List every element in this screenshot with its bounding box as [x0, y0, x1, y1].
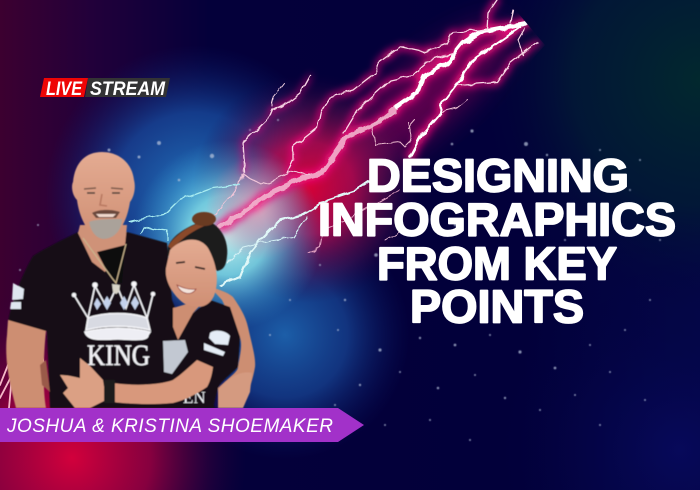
woman: face	[166, 240, 217, 307]
man: hand on woman's back	[218, 372, 252, 408]
QUEEN shirt text fragment: EN	[183, 388, 206, 407]
man: sleeve logo	[10, 283, 24, 309]
name banner	[0, 408, 364, 442]
man: necklace	[83, 238, 126, 283]
badge: red tab	[40, 78, 88, 97]
badge: dark tab	[85, 78, 170, 97]
woman: shirt graphic	[163, 340, 188, 374]
banner: purple arrow	[0, 408, 364, 442]
lightning cores	[130, 0, 537, 285]
man's fingers behind	[40, 360, 50, 392]
man: nose	[100, 194, 107, 206]
man: beard	[89, 219, 122, 239]
woman: shirt	[184, 300, 240, 406]
woman: hair bun	[192, 212, 216, 226]
man: neck	[78, 225, 127, 272]
man: shirt and torso	[7, 232, 215, 408]
star field	[19, 119, 661, 441]
man: eyes and brows	[84, 188, 123, 189]
title: Designing Infographics From Key Points: POINTS	[410, 280, 584, 332]
banner: names: JOSHUA & KRISTINA SHOEMAKER	[6, 416, 333, 437]
badge: STREAM: STREAM	[90, 79, 166, 100]
woman: hair	[167, 220, 227, 271]
woman: smile	[177, 285, 196, 294]
lightning glow	[220, 0, 537, 227]
crown on shirt	[72, 282, 154, 340]
woman: eyes	[176, 262, 205, 269]
title: Designing Infographics From Key Points: FROM KEY	[377, 238, 617, 290]
man: black collar	[97, 245, 125, 283]
KING shirt text: KING	[87, 339, 150, 372]
woman: hand	[60, 358, 106, 408]
lightning bolts	[130, 0, 537, 285]
man: mustache and mouth	[92, 210, 120, 218]
Live Stream badge	[40, 78, 170, 100]
man: left arm	[6, 320, 46, 408]
woman: forearm	[113, 360, 213, 404]
badge: LIVE: LIVE	[46, 79, 83, 100]
man: right arm around woman	[214, 288, 256, 390]
lightning behind people, lower left	[0, 345, 45, 408]
photo: Joshua and Kristina Shoemaker	[6, 152, 255, 408]
pendant	[112, 284, 120, 294]
woman: sleeve logo	[204, 331, 230, 356]
title: Designing Infographics From Key Points	[318, 150, 676, 332]
woman: neck	[172, 304, 199, 340]
man: head	[71, 151, 136, 226]
title: Designing Infographics From Key Points: DESIGNING	[367, 150, 629, 202]
watch	[104, 380, 115, 403]
title: Designing Infographics From Key Points: INFOGRAPHICS	[318, 194, 676, 246]
